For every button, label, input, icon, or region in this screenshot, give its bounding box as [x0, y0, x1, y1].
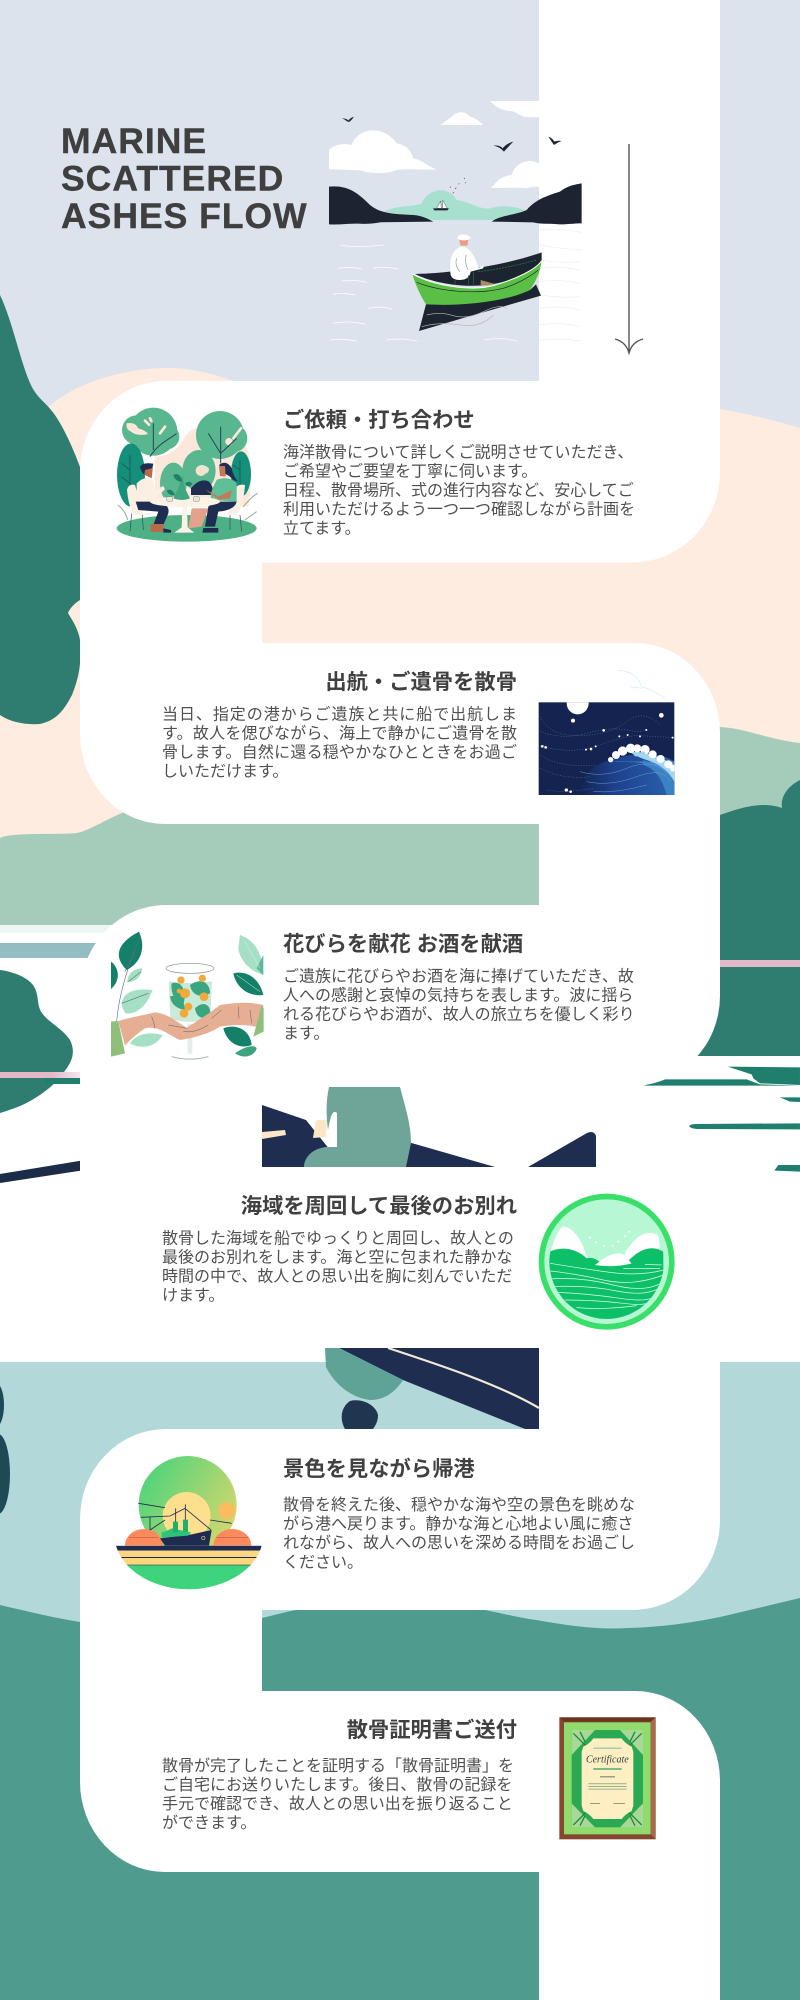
heading: ご依頼・打ち合わせ: [283, 407, 475, 432]
body text: [162, 706, 517, 780]
heading: 花びらを献花 お酒を献酒: [283, 932, 523, 956]
body text: 散骨が完了したことを証明する「散骨証明書」を: [162, 1757, 514, 1775]
body text: ます。: [283, 1024, 329, 1042]
body text: 立てます。: [283, 520, 361, 538]
icon: sea in circle badge: [539, 1194, 675, 1330]
body text: れる花びらやお酒が、故人の旅立ちを優しく彩り: [283, 1006, 635, 1024]
title: ASHES FLOW: [61, 196, 308, 236]
panel: step 6 certificate delivery: [80, 1691, 720, 1872]
panel: step 5 return to port: [80, 1429, 720, 1610]
body text: ご自宅にお送りいたします。後日、散骨の記録を: [162, 1776, 512, 1794]
title: [61, 121, 308, 236]
icon: framed certificate: Certificate: [586, 1755, 629, 1766]
body text: 最後のお別れをします。海と空に包まれた静かな: [162, 1248, 512, 1266]
body text: [283, 968, 635, 1042]
heading: 出航・ご遺骨を散骨: [325, 669, 517, 694]
body text: 散骨した海域を船でゆっくりと周回し、故人との: [162, 1230, 514, 1248]
body text: がら港へ戻ります。静かな海と心地よい風に癒さ: [283, 1515, 633, 1533]
icon: glass with petals held by hands: [111, 932, 264, 1059]
body text: ください。: [283, 1554, 363, 1572]
body text: ご遺族に花びらやお酒を海に捧げていただき、故: [283, 968, 634, 986]
body text: [162, 1230, 514, 1304]
icon: night sea wave: [539, 670, 677, 795]
title: MARINE: [61, 121, 207, 161]
panel: step 1 consultation: [80, 381, 720, 562]
body text: しいただけます。: [162, 762, 288, 780]
body text: [283, 444, 635, 538]
body text: 海洋散骨について詳しくご説明させていただき、: [283, 444, 633, 462]
panel: step 2 departure: [80, 643, 720, 824]
body text: 時間の中で、故人との思い出を胸に刻んでいただ: [162, 1268, 512, 1286]
body text: 骨します。自然に還る穏やかなひとときをお過ご: [162, 744, 517, 762]
heading: 海域を周回して最後のお別れ: [241, 1194, 517, 1218]
icon: framed certificate: [559, 1717, 656, 1839]
body text: れながら、故人への思いを深める時間をお過ごし: [283, 1534, 635, 1552]
body text: 散骨を終えた後、穏やかな海や空の景色を眺めな: [283, 1496, 635, 1514]
body text: 手元で確認でき、故人との思い出を振り返ること: [162, 1795, 513, 1813]
body text: [283, 1496, 635, 1572]
body text: ができます。: [162, 1814, 256, 1832]
body text: けます。: [162, 1286, 224, 1304]
panel: step 4 farewell circuit: [162, 1194, 675, 1348]
body text: 利用いただけるよう一つ一つ確認しながら計画を: [283, 500, 635, 518]
title: SCATTERED: [61, 158, 284, 198]
heading: 散骨証明書ご送付: [347, 1717, 517, 1742]
body text: 日程、散骨場所、式の進行内容など、安心してご: [283, 482, 634, 500]
icon: people meeting among trees: [117, 408, 258, 542]
panel: step 3 flower and sake offering: [80, 905, 720, 1086]
body text: 当日、指定の港からご遺族と共に船で出航しま: [162, 706, 517, 724]
body text: ご希望やご要望を丁寧に伺います。: [283, 462, 537, 480]
icon: ship at sunset: [112, 1456, 265, 1592]
body text: す。故人を偲びながら、海上で静かにご遺骨を散: [162, 724, 517, 742]
body text: 人への感謝と哀悼の気持ちを表します。波に揺ら: [283, 986, 633, 1004]
heading: 景色を見ながら帰港: [283, 1456, 475, 1481]
illustration: man in green boat on the sea: [329, 101, 587, 344]
arrow: flow down: [615, 144, 643, 353]
body text: [162, 1757, 514, 1832]
